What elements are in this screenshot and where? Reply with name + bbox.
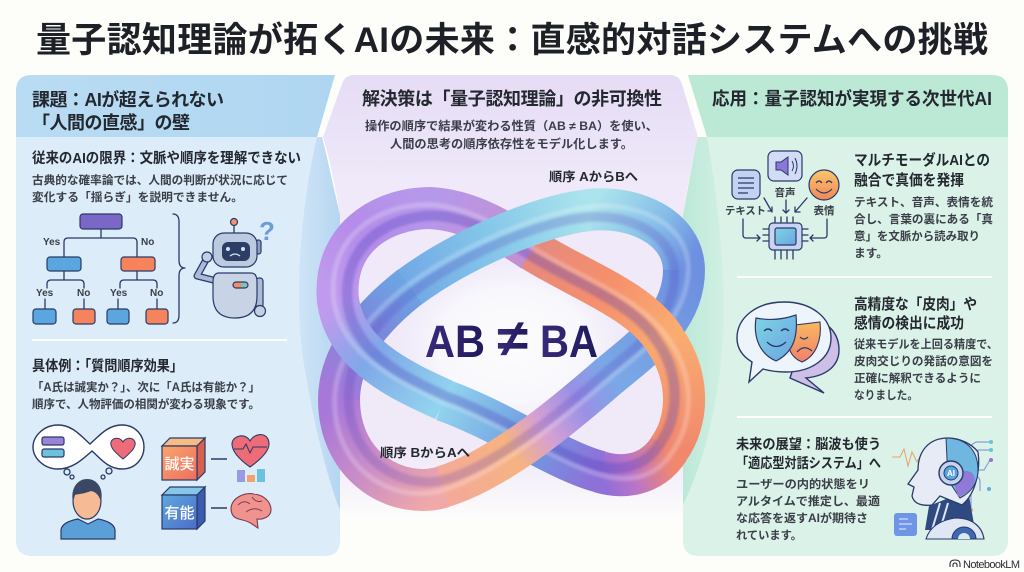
label: order B to A: 順序 BからAへ [380,445,471,460]
icon: sincerity cube: 誠実 [164,456,195,473]
central glow [387,250,637,440]
text block: concrete example: 順序で、人物評価の相関が変わる現象です。 [32,397,260,411]
text block: sarcasm detection: 従来モデルを上回る精度で、 [854,337,998,351]
icon: multimodal fusion [725,151,839,259]
formula: AB not equal BA [425,310,598,368]
panel: applications [683,75,1008,556]
text block: limits of conventional AI: 従来のAIの限界：文脈や順序を理解できない [32,149,301,167]
text block: future outlook: アルタイムで推定し、最適 [736,494,880,508]
chart: decision tree: No [77,288,90,299]
text block: limits of conventional AI [32,149,301,204]
icon: AI head with brainwaves: AI [947,469,955,478]
icon: competence cube: 有能 [164,505,195,522]
text block: solution description: 人間の思考の順序依存性をモデル化します。 [390,137,633,151]
text block: sarcasm detection [854,295,998,402]
chart: decision tree: Yes [43,237,61,248]
text block: concrete example [32,358,260,411]
icon: sincerity cube [162,438,205,480]
formula: AB not equal BA: BA [540,316,598,367]
formula: AB not equal BA: AB [425,316,485,367]
text block: limits of conventional AI: 古典的な確率論では、人間の判断が状況に応じて [32,173,288,187]
icon: heart with pulse [232,435,269,467]
chart: decision tree: Yes [36,288,54,299]
divider [737,276,992,278]
icon: AI head with brainwaves [892,438,993,539]
logo: NotebookLM: NotebookLM [963,559,1020,571]
icon: multimodal fusion: テキスト [725,205,766,217]
icon: confused robot: ? [259,216,275,246]
icon: multimodal fusion: 表情 [814,204,835,217]
connectors [211,459,227,508]
text block: concrete example: 「A氏は誠実か？」、次に「A氏は有能か？」 [32,380,260,394]
icon: comedy and tragedy masks in speech bubbles [737,302,839,393]
text block: multimodal: テキスト、音声、表情を統 [854,195,993,209]
text block: multimodal: ます。 [854,247,888,260]
text block: multimodal: 意」を文脈から読み取り [854,229,980,243]
icon: person with thought bubble [33,425,144,539]
title: 量子認知理論が拓くAIの未来：直感的対話システムへの挑戦 [36,21,988,60]
text block: sarcasm detection: 正確に解釈できるように [854,371,981,385]
text block: solution description: 操作の順序で結果が変わる性質（AB ≠ BA）を使い、 [365,119,658,133]
text block: future outlook: れています。 [736,529,802,542]
chart: decision tree [33,214,168,324]
chart: decision tree: No [141,237,154,248]
heading: applications: 応用：量子認知が実現する次世代AI [712,88,992,109]
text block: multimodal [854,151,993,260]
formula: AB not equal BA: ≠ [497,310,528,368]
text block: limits of conventional AI: 変化する「揺らぎ」を説明できません。 [32,190,243,204]
icon: multimodal fusion: 音声 [774,186,796,199]
divider [32,339,287,341]
icon: competence cube [162,487,205,529]
text block: future outlook: 「適応型対話システム」へ [736,455,881,471]
icon: confused robot [197,216,275,318]
text block: solution description [365,119,658,151]
panel: center background [323,75,698,520]
text block: sarcasm detection: 皮肉交じりの発話の意図を [854,354,993,368]
text block: future outlook: ユーザーの内的状態をリ [736,477,870,491]
chart: twisted infinity ribbon [333,205,688,494]
text block: future outlook: 未来の展望：脳波も使う [736,436,881,452]
text block: future outlook [736,436,881,542]
label: order A to B: 順序 AからBへ [549,169,639,184]
chart: decision tree: Yes [110,288,128,299]
text block: multimodal: 合し、言葉の裏にある「真 [854,212,993,226]
heading: challenges: 「人間の直感」の壁 [32,112,190,133]
text block: future outlook: な応答を返すAIが期待さ [736,511,868,525]
icon: brain [231,494,271,528]
text block: sarcasm detection: 感情の検出に成功 [854,314,964,332]
heading: challenges [32,89,224,133]
divider [737,416,992,418]
text block: concrete example: 具体例：「質問順序効果」 [32,358,183,375]
text block: sarcasm detection: なりました。 [854,389,918,402]
text block: multimodal: マルチモーダルAIとの [854,151,990,169]
text block: sarcasm detection: 高精度な「皮肉」や [854,295,977,313]
heading: solution: 解決策は「量子認知理論」の非可換性 [362,89,662,109]
heading: challenges: 課題：AIが超えられない [32,89,224,110]
panel: challenges [16,75,340,556]
chart: decision tree: No [150,288,163,299]
text block: multimodal: 融合で真価を発揮 [854,171,964,189]
icon: brace [173,214,185,323]
chart: small bars [237,469,265,482]
